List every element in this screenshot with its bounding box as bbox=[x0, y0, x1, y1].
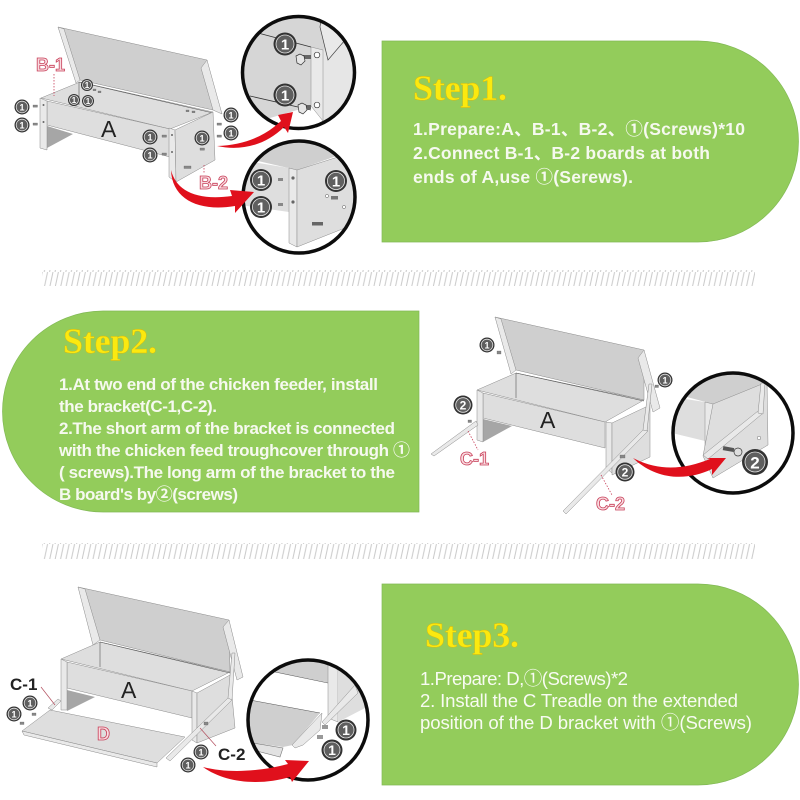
diagram: step 3 feeder with treadle D bbox=[6, 587, 245, 772]
text block: step 2 instructions bbox=[58, 375, 410, 504]
screw number markers: 1 bbox=[19, 102, 25, 112]
label: B-2: B-2 bbox=[199, 173, 228, 193]
panel: step 1 bbox=[382, 41, 798, 242]
screw number markers: 1 bbox=[198, 748, 204, 758]
label: B-1: B-1 bbox=[36, 55, 65, 75]
text block: step 2 instructions: B board's by②(screws) bbox=[59, 485, 238, 504]
screw number markers: 1 bbox=[228, 110, 234, 120]
screws bbox=[33, 89, 222, 168]
callout: step 1 detail top: 1 bbox=[281, 36, 289, 54]
callout: step 1 detail top: 1 bbox=[281, 88, 289, 104]
screw number markers bbox=[6, 696, 208, 772]
text block: step 2 instructions: 2.The short arm of the bracket is connected bbox=[59, 419, 395, 438]
screw number markers: 2 bbox=[460, 398, 467, 412]
text block: step 3 instructions: 1.Prepare: D,①(Screws)*2 bbox=[420, 668, 628, 689]
text block: step 2 instructions: ( screws).The long arm of the bracket to the bbox=[59, 463, 395, 482]
treadle D bbox=[22, 710, 185, 763]
label: C-2: C-2 bbox=[218, 745, 245, 764]
callout: step 1 detail bottom: 1 bbox=[332, 174, 340, 190]
arrow: step 1 to top detail bbox=[217, 112, 293, 148]
callout: step 1 detail bottom bbox=[240, 138, 360, 256]
arrow: step 1 to bottom detail bbox=[171, 170, 254, 213]
screw number markers: 1 bbox=[199, 134, 205, 144]
screw number markers: 1 bbox=[86, 97, 91, 106]
text block: step 1 instructions bbox=[413, 119, 745, 187]
diagram: step 2 feeder with brackets bbox=[431, 317, 672, 514]
text block: step 2 instructions: with the chicken feed troughcover through ① bbox=[58, 441, 410, 460]
heading: Step1: Step1. bbox=[413, 68, 507, 108]
label: C-2: C-2 bbox=[596, 494, 625, 514]
callout: step 3 detail bbox=[247, 659, 369, 781]
callout: step 3 detail: 1 bbox=[328, 742, 336, 758]
label: A: A bbox=[101, 116, 117, 142]
screw number markers: 1 bbox=[228, 128, 234, 138]
label: A: A bbox=[540, 407, 556, 433]
screw number markers bbox=[14, 79, 238, 162]
callout: step 2 detail: 2 bbox=[750, 454, 760, 472]
heading: Step2: Step2. bbox=[63, 321, 157, 361]
heading: Step3: Step3. bbox=[425, 615, 519, 655]
bracket C-2 bbox=[166, 697, 232, 761]
bracket C-2 bbox=[563, 428, 648, 514]
panel: step 2 bbox=[3, 311, 419, 512]
bracket C-1 end bbox=[48, 699, 61, 710]
screw number markers: 2 bbox=[622, 466, 629, 480]
label: B-1 bbox=[36, 55, 65, 96]
screw number markers bbox=[454, 338, 672, 482]
text block: step 2 instructions: the bracket(C-1,C-2). bbox=[59, 397, 217, 416]
text block: step 1 instructions: 2.Connect B-1、B-2 boards at both bbox=[413, 143, 710, 163]
label: C-1 bbox=[460, 431, 489, 469]
text block: step 1 instructions: ends of A,use ①(Serews). bbox=[413, 167, 633, 187]
screw number markers: 1 bbox=[147, 132, 153, 142]
arrow: step 2 to detail bbox=[633, 458, 726, 477]
diagram: step 1 feeder with boards B-1 and B-2 bbox=[14, 27, 238, 193]
panel: step 3 bbox=[382, 584, 798, 785]
screw number markers: 1 bbox=[147, 150, 153, 160]
label: C-2 bbox=[596, 475, 625, 514]
label: C-1: C-1 bbox=[460, 449, 489, 469]
screw number markers: 1 bbox=[185, 760, 191, 770]
label: D: D bbox=[97, 724, 110, 744]
callout: step 1 detail bottom: 1 bbox=[257, 200, 265, 216]
label: C-1 bbox=[10, 675, 55, 705]
text block: step 3 instructions: position of the D bracket with ①(Screws) bbox=[420, 712, 752, 733]
screw number markers: 1 bbox=[72, 96, 77, 105]
callout: step 1 detail top bbox=[240, 14, 358, 132]
text block: step 1 instructions: 1.Prepare:A、B-1、B-2、①(Screws)*10 bbox=[413, 119, 745, 139]
callout: step 2 detail bbox=[672, 372, 794, 494]
screw number markers: 1 bbox=[11, 710, 17, 720]
arrow: step 3 to detail bbox=[203, 760, 309, 782]
screw number markers: 1 bbox=[19, 120, 25, 130]
screw number markers: 1 bbox=[662, 376, 668, 386]
bracket arm bbox=[643, 384, 652, 431]
text block: step 3 instructions bbox=[420, 668, 752, 733]
callout: step 3 detail: 1 bbox=[342, 722, 350, 738]
text block: step 2 instructions: 1.At two end of the chicken feeder, install bbox=[59, 375, 378, 394]
label: C-2 bbox=[200, 728, 245, 764]
label: C-1: C-1 bbox=[10, 675, 37, 694]
label: A: A bbox=[121, 677, 137, 703]
text block: step 3 instructions: 2. Install the C Treadle on the extended bbox=[420, 690, 738, 711]
callout: step 1 detail bottom: 1 bbox=[257, 172, 265, 190]
bracket C-1 bbox=[431, 421, 478, 456]
screw number markers: 1 bbox=[484, 340, 490, 350]
screw number markers: 1 bbox=[85, 81, 90, 90]
screw number markers: 1 bbox=[27, 698, 33, 708]
